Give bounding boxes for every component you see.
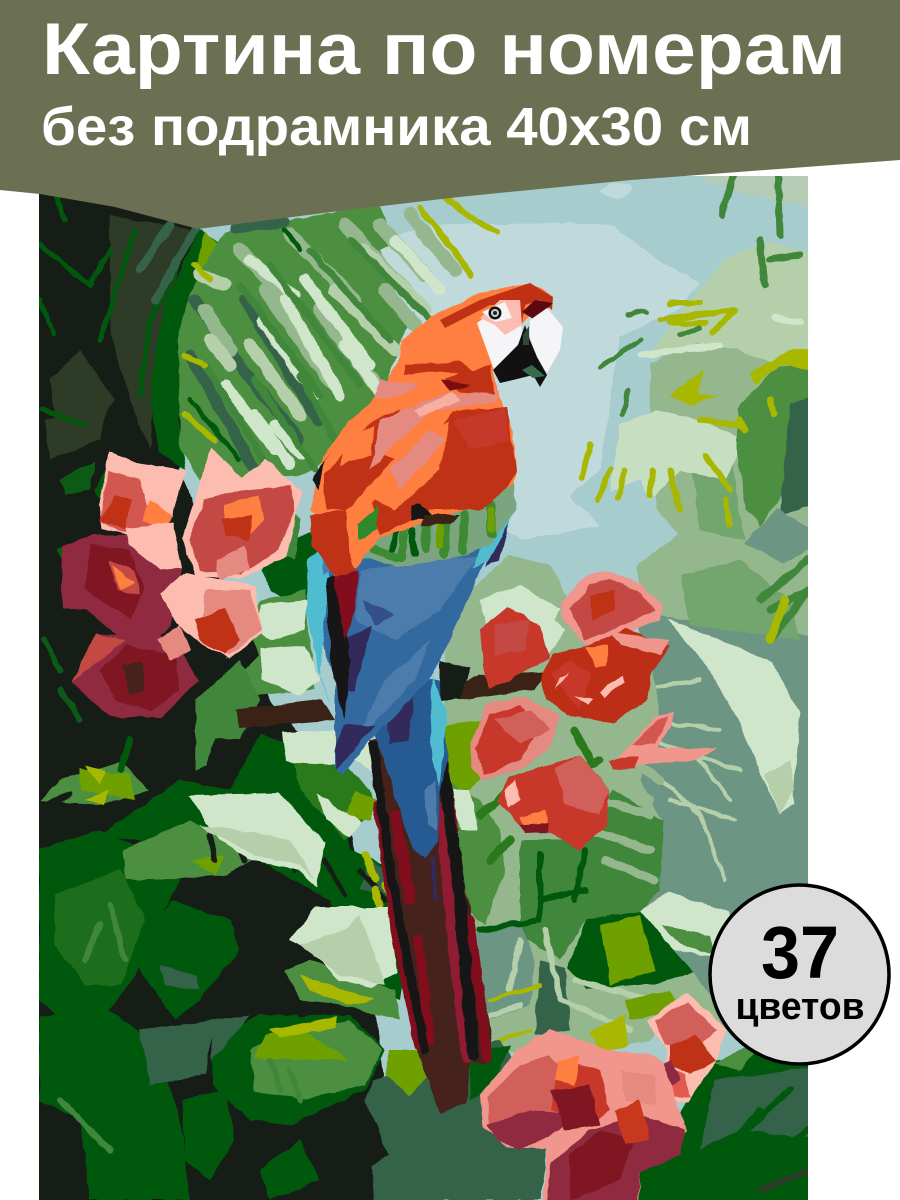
parrot (307, 283, 553, 1113)
flower A (560, 570, 662, 646)
black lower beak (493, 325, 547, 387)
sage foliage mass on the right (582, 176, 830, 640)
sky background (179, 176, 808, 1200)
white beak (530, 308, 563, 373)
lower-left foliage (39, 735, 445, 1200)
tail feathers (370, 677, 492, 1113)
palm fronds behind the parrot (178, 197, 497, 480)
pink spray (608, 711, 717, 770)
central flowers (470, 570, 717, 850)
leaves and branch between left flowers and parrot (194, 514, 543, 771)
red breast (373, 407, 517, 535)
blue wing (310, 525, 510, 775)
parrot head details (440, 283, 563, 387)
red crown (440, 283, 553, 328)
lower right grey-green ground (638, 615, 808, 998)
flower right (647, 993, 727, 1103)
black feather stripe and red shoulder (325, 575, 350, 720)
green wing band (357, 477, 516, 567)
title: Картина по номерам (42, 9, 846, 90)
cyan feather edges (307, 540, 330, 705)
badge number: 37 (761, 911, 839, 994)
flower D (470, 697, 560, 780)
left flowers (62, 448, 302, 717)
central green bushes (440, 555, 740, 1200)
painting: macaw in the jungle (20, 160, 830, 1200)
flower 1 (99, 452, 186, 535)
flower E (497, 756, 610, 850)
pale leaves lower left (189, 730, 397, 987)
header banner (0, 0, 900, 229)
bottom flowers (480, 993, 727, 1200)
flower 2 (182, 448, 302, 580)
pale leaves on the right (640, 618, 800, 956)
subtitle: без подрамника 40х30 см (41, 97, 752, 157)
flower 4 (159, 572, 262, 659)
dark jungle on the left (39, 194, 389, 1200)
badge label: цветов (736, 986, 864, 1028)
bottom-right foliage (638, 1047, 808, 1200)
flower 5 (72, 625, 199, 717)
back feather details (325, 410, 400, 510)
flower 3 (61, 522, 182, 636)
badge: 37 colours (710, 885, 889, 1064)
flower C (480, 607, 550, 689)
flower cluster (480, 1029, 687, 1200)
white face (477, 300, 522, 370)
orange head and back (310, 283, 553, 577)
flower B (540, 629, 670, 723)
eye (488, 306, 502, 320)
